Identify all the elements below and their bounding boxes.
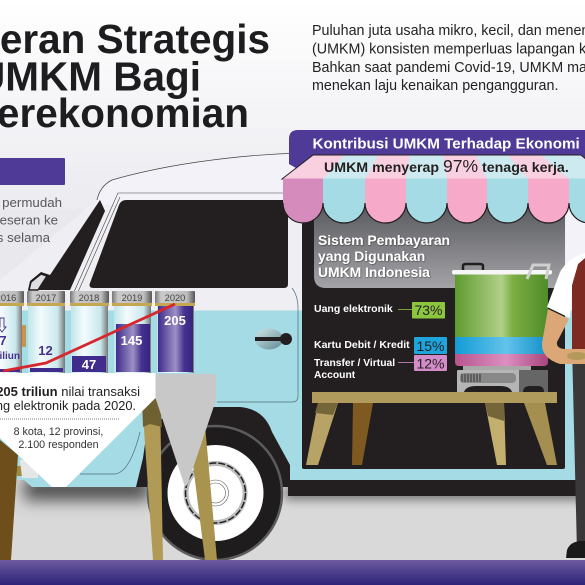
purple banner — [289, 130, 585, 168]
stall black panel — [302, 200, 565, 469]
stat: uang elektronik — [314, 302, 445, 318]
jar 2019: 2019 — [122, 293, 142, 303]
jar 2017: 12 — [38, 343, 53, 358]
stat: transfer virtual account: Transfer / Virtual — [314, 358, 395, 369]
left text block: eseran ke — [0, 212, 58, 228]
title — [0, 16, 270, 136]
awning — [282, 155, 585, 223]
body crease — [217, 401, 292, 403]
jar 2020 — [155, 291, 195, 373]
white callout: 8 kota, 12 provinsi, — [14, 426, 103, 438]
jar 2017 — [27, 291, 65, 373]
left table legs — [0, 398, 217, 560]
stat: uang elektronik: 73% — [414, 302, 443, 318]
stove — [457, 366, 548, 392]
payment system heading: yang Digunakan — [318, 248, 425, 264]
vest — [572, 258, 585, 352]
bumper band — [288, 480, 585, 496]
shoe — [566, 541, 585, 558]
awning headline: UMKM menyerap 97% tenaga kerja. — [324, 156, 569, 176]
bumper line — [80, 432, 140, 474]
jar 2020: 2020 — [165, 293, 185, 303]
jar chart — [0, 291, 195, 373]
scallop outlines — [283, 203, 585, 223]
awning scallops — [283, 178, 585, 223]
pot — [452, 264, 552, 366]
stat: kartu debit kredit: Kartu Debit / Kredit — [314, 339, 410, 351]
jar 2016 — [0, 291, 24, 373]
jar 2018: 47 — [82, 357, 96, 372]
person — [542, 253, 585, 558]
right white side — [566, 205, 585, 310]
van body lower — [0, 310, 585, 487]
rear window — [90, 200, 288, 288]
left purple heading box — [0, 158, 65, 185]
blue side strip — [565, 315, 573, 480]
intro paragraph: menekan laju kenaikan pengangguran. — [312, 78, 558, 94]
stat: kartu debit kredit: 15% — [416, 338, 445, 354]
white callout — [0, 373, 156, 487]
jar 2017: 2017 — [36, 293, 56, 303]
ground — [0, 210, 585, 560]
stat: transfer virtual account — [314, 355, 447, 381]
callout text: 205 triliun nilai transaksi — [0, 384, 140, 399]
arm — [542, 309, 585, 364]
grey pennant — [156, 374, 216, 486]
payment system heading — [318, 232, 450, 280]
left leg — [0, 440, 18, 560]
mirror — [29, 274, 47, 290]
left text block: permudah — [2, 195, 62, 210]
front bumper chrome — [17, 460, 38, 478]
van — [0, 153, 585, 560]
left text block — [0, 195, 62, 245]
jar 2019: 145 — [121, 333, 142, 348]
sleeve — [547, 253, 585, 318]
bowl in hand — [567, 352, 585, 360]
payment system heading: Sistem Pembayaran — [318, 232, 450, 248]
background — [0, 0, 585, 210]
trend line — [3, 304, 175, 371]
front side window — [28, 200, 105, 290]
door handle — [255, 328, 292, 350]
wheel — [148, 426, 282, 560]
jar 2020: 205 — [164, 313, 186, 328]
jar 2018: 2018 — [79, 293, 99, 303]
stat: transfer virtual account: 12% — [416, 356, 445, 372]
window frame line — [74, 193, 295, 292]
jar 2018 — [70, 291, 109, 373]
right leg — [188, 425, 217, 560]
white callout: 2.100 responden — [18, 439, 99, 451]
roof line — [97, 153, 300, 200]
trousers — [572, 345, 585, 552]
stall grey panel — [314, 200, 565, 288]
intro paragraph — [312, 23, 585, 94]
small door latch — [22, 325, 26, 347]
table — [306, 392, 557, 465]
stat: uang elektronik: Uang elektronik — [314, 303, 393, 315]
stat: kartu debit kredit — [314, 337, 447, 354]
stat: transfer virtual account: Account — [314, 370, 356, 381]
payment system heading: UMKM Indonesia — [318, 264, 430, 280]
middle leg — [142, 398, 163, 560]
wheel arch — [136, 407, 290, 487]
purple banner: Kontribusi UMKM Terhadap Ekonomi — [312, 136, 580, 152]
door line — [292, 288, 298, 402]
van body upper — [0, 200, 585, 320]
jar 2019 — [112, 291, 152, 373]
white callout: ng elektronik pada 2020. — [0, 398, 136, 413]
stall — [282, 130, 585, 469]
bottom purple band — [0, 560, 585, 585]
